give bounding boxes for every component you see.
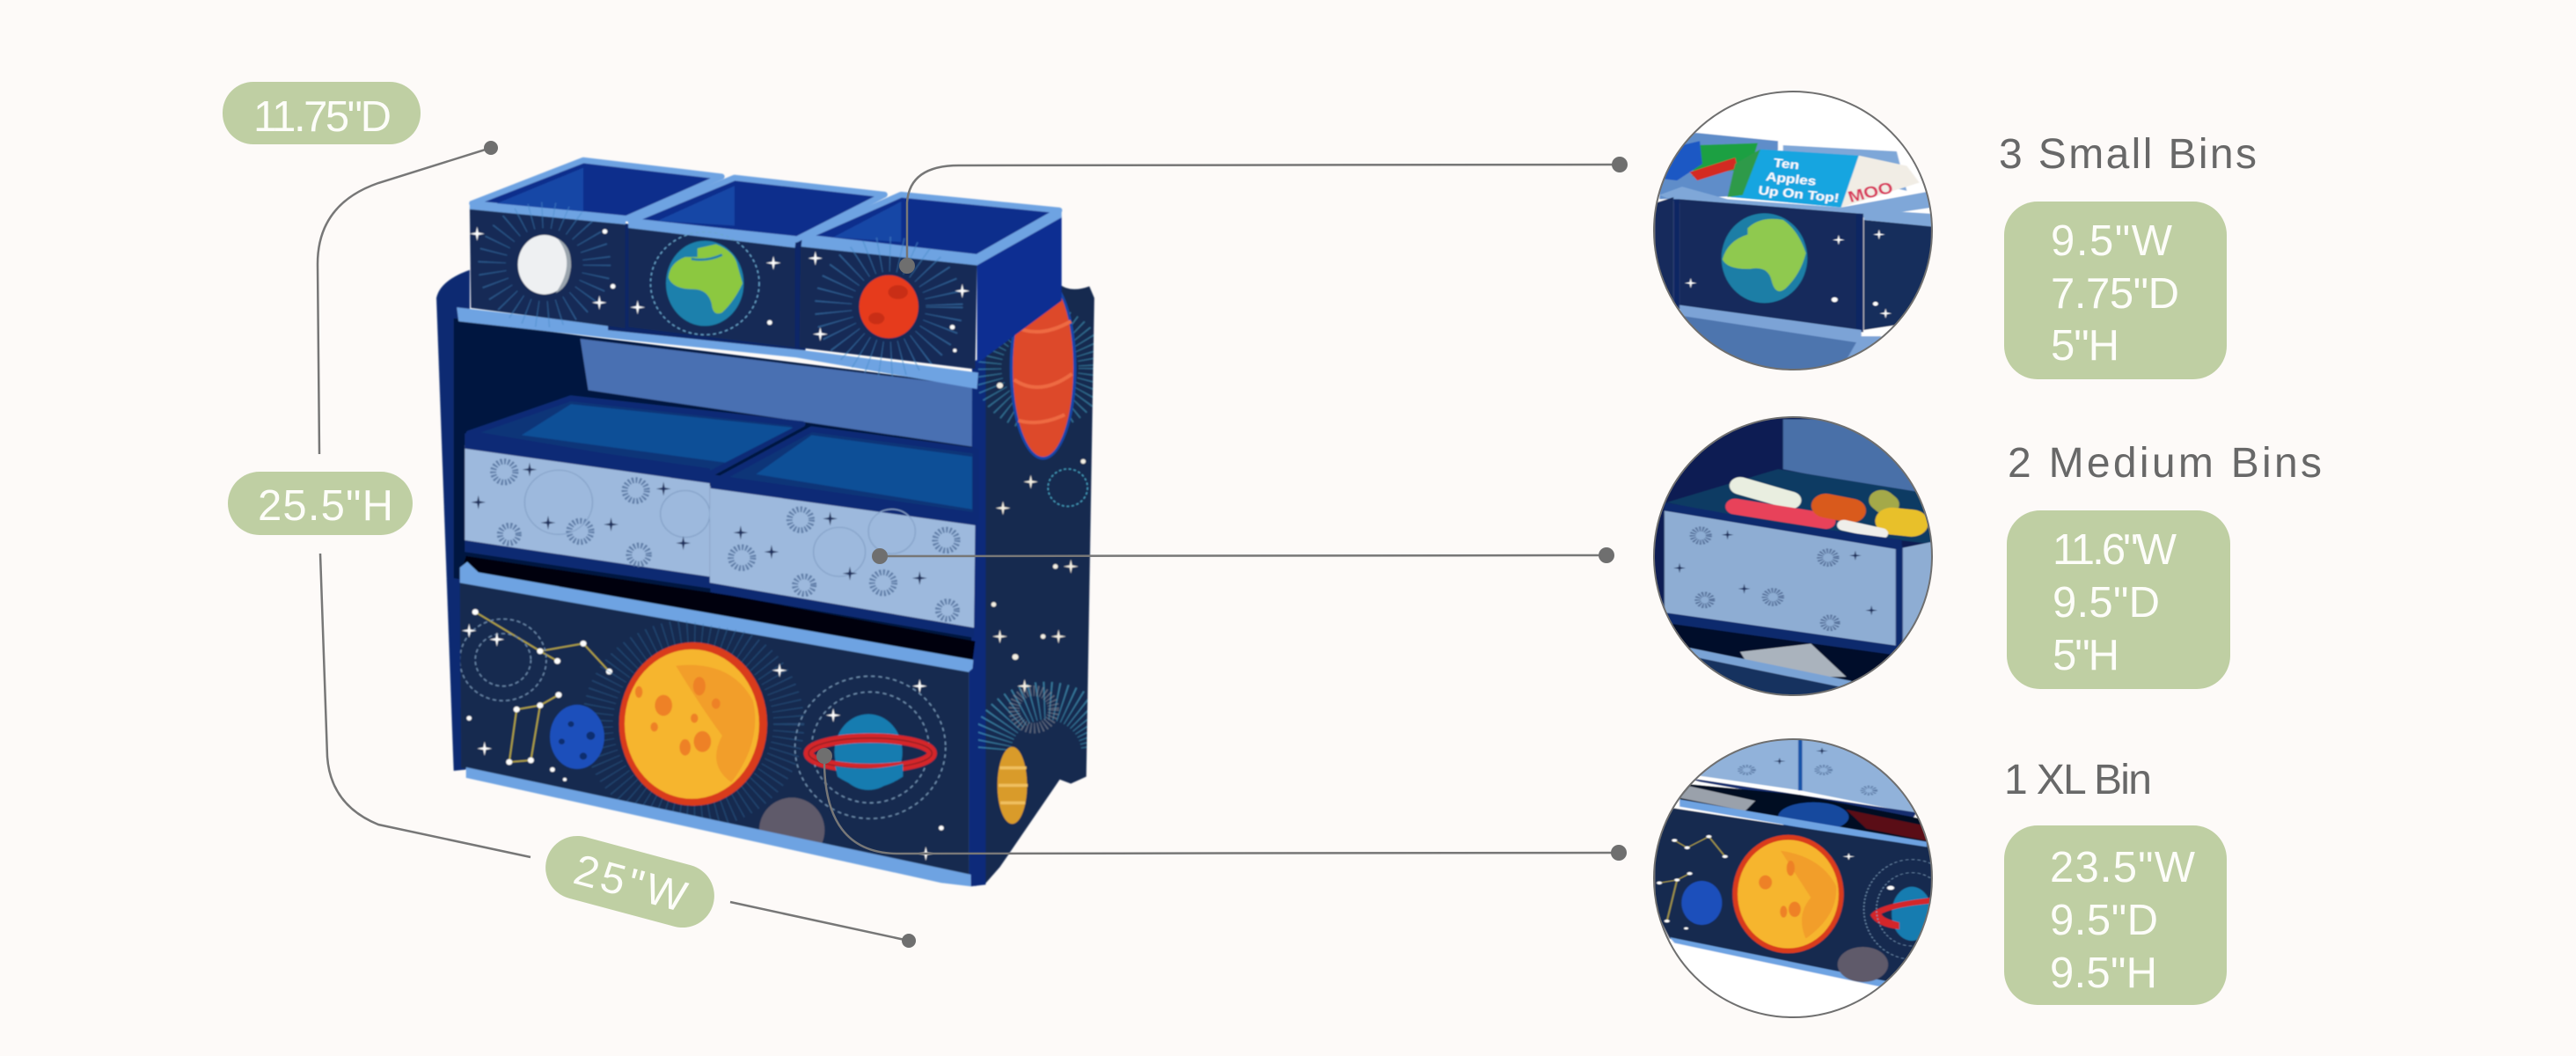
book: Ten Apples Up On Top: Ten <box>1773 157 1800 172</box>
spec card: medium bins: 11.6"W <box>2053 526 2177 574</box>
leader: XL bin <box>824 756 1619 854</box>
spec card: XL bin: 9.5"H <box>2050 950 2157 997</box>
book: Ten Apples Up On Top <box>1728 150 1859 208</box>
spec card: XL bin <box>2004 825 2227 1005</box>
dimension line: height and width <box>320 554 531 857</box>
pill: depth: 11.75"D <box>253 93 392 141</box>
leader dots <box>484 141 1628 948</box>
pill: width <box>538 829 721 935</box>
leader: medium bins <box>880 555 1606 556</box>
spec card: medium bins <box>2007 510 2230 689</box>
upper interior <box>454 319 977 671</box>
pill: depth <box>223 82 421 144</box>
heading: medium bins: 2 Medium Bins <box>2008 440 2322 487</box>
earth <box>1722 213 1807 303</box>
icon: earth <box>666 241 743 326</box>
lower rim <box>1679 304 1882 358</box>
detail circle: XL bin <box>1653 738 1933 1018</box>
back fabric panel <box>580 339 977 447</box>
front bin rim <box>1659 187 1932 218</box>
small bin 1 <box>470 160 721 328</box>
sun <box>1732 835 1844 953</box>
icon: sun <box>619 642 767 806</box>
book: Ten Apples Up On Top: Apples <box>1765 170 1818 188</box>
book: white cover: MOO <box>1846 180 1896 206</box>
grey moon <box>1838 947 1888 982</box>
XL bin <box>460 556 976 886</box>
medium bin right <box>710 429 977 638</box>
toy organizer illustration <box>436 160 1101 886</box>
small bin 2 <box>628 178 884 348</box>
rear toys <box>1659 133 1778 199</box>
detail circle: small bin <box>1653 91 1933 370</box>
icon: ringed planet <box>795 676 946 818</box>
pill: height <box>228 472 413 535</box>
toys in bin <box>1735 486 1912 533</box>
leader: small bins <box>907 165 1620 266</box>
top shelf edge <box>457 307 978 389</box>
spec card: small bins: 9.5"W <box>2051 217 2173 265</box>
right side panel <box>971 276 1101 886</box>
book: white cover <box>1841 156 1920 208</box>
spec card: XL bin: 9.5"D <box>2050 897 2158 944</box>
icon: blue planet <box>550 705 604 769</box>
bottom <box>1673 623 1890 681</box>
infographic canvas <box>223 82 2321 1018</box>
spec card: XL bin: 23.5"W <box>2050 844 2196 891</box>
heading: XL bin: 1 XL Bin <box>2004 757 2152 803</box>
heading: small bins: 3 Small Bins <box>1999 131 2257 178</box>
icon: mars <box>860 275 918 338</box>
left side panel <box>436 270 470 771</box>
spec card: small bins <box>2004 202 2227 379</box>
spec card: small bins: 5"H <box>2051 322 2119 370</box>
detail circle: medium bin <box>1653 416 1933 696</box>
spec card: medium bins: 9.5"D <box>2053 579 2160 627</box>
constellation <box>1659 837 1725 921</box>
icon: moon <box>518 235 571 295</box>
pill: height: 25.5"H <box>258 482 393 530</box>
spec card: small bins: 7.75"D <box>2051 270 2179 318</box>
ringed planet <box>1892 887 1932 941</box>
constellation <box>460 609 612 765</box>
blue planet <box>1681 881 1722 925</box>
small bin 3 <box>800 194 1062 370</box>
book: Ten Apples Up On Top: Up On Top! <box>1757 184 1840 205</box>
icon: red planet <box>1010 276 1076 459</box>
small bin backing <box>608 222 806 350</box>
dimension line: depth and height <box>318 148 1620 941</box>
pill: width: 25"W <box>569 846 692 921</box>
spec card: medium bins: 5"H <box>2053 632 2119 679</box>
bin front <box>1665 510 1899 646</box>
icon: grey moon <box>758 797 825 843</box>
medium bin left <box>465 399 802 589</box>
